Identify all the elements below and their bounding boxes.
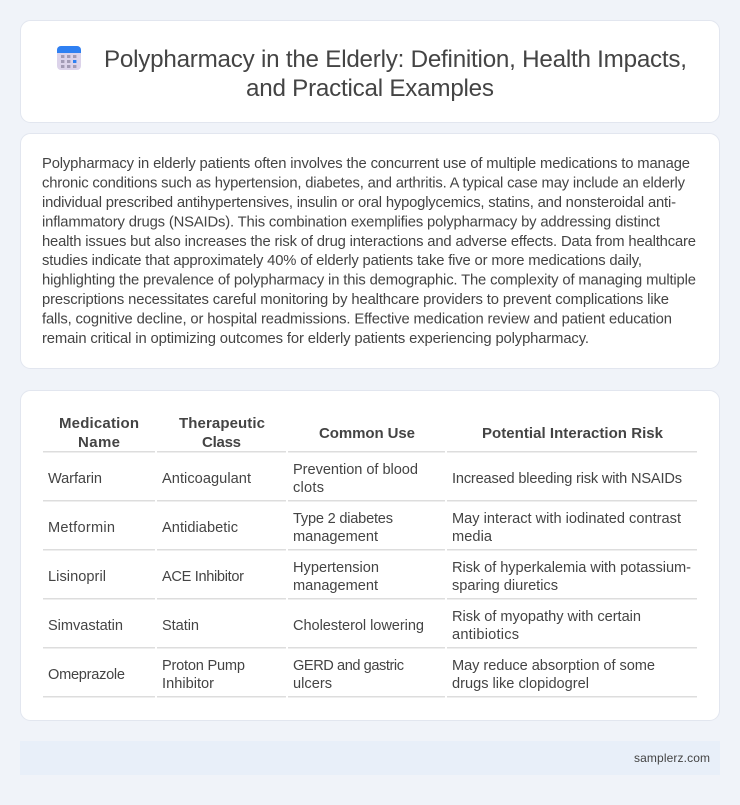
table row: Simvastatin xyxy=(43,609,697,648)
table row: Metformin: Metformin xyxy=(48,520,115,536)
table row: Omeprazole: GERD and gastric xyxy=(293,658,404,674)
table row: Metformin xyxy=(43,511,697,550)
panel: title card xyxy=(20,20,720,122)
table row: Lisinopril: Lisinopril xyxy=(48,569,106,585)
table row: Lisinopril xyxy=(43,560,697,600)
text block: polypharmacy overview: Polypharmacy in elderly patients often involves the concurrent use of multiple medications to manage xyxy=(42,156,690,172)
table row: Metformin: management xyxy=(293,529,378,545)
text block: polypharmacy overview: prescriptions necessitates careful monitoring by healthcare providers to prevent complications like xyxy=(42,292,669,308)
text block: polypharmacy overview: falls, cognitive decline, or hospital readmissions. Effective medication review and patient education xyxy=(42,312,672,328)
table header: Common Use xyxy=(319,425,415,442)
table row: Omeprazole xyxy=(43,658,697,698)
table row: Simvastatin: Simvastatin xyxy=(48,618,123,634)
table header: Potential Interaction Risk xyxy=(482,425,664,442)
table row: Omeprazole: May reduce absorption of some xyxy=(452,658,655,674)
footer: samplerz.com xyxy=(634,751,710,765)
table row: Warfarin: Anticoagulant xyxy=(162,471,251,487)
table row: Omeprazole: Proton Pump xyxy=(162,658,245,674)
table row: Metformin: May interact with iodinated contrast xyxy=(452,511,681,527)
text block: polypharmacy overview: individual prescribed antihypertensives, insulin or oral hypoglycemics, statins, and nonsteroidal anti- xyxy=(42,195,676,211)
panel: medication table xyxy=(20,390,720,720)
table row: Simvastatin: Risk of myopathy with certain xyxy=(452,609,641,625)
text block: polypharmacy overview xyxy=(42,156,696,347)
table header: Class xyxy=(202,434,241,451)
table row: Metformin: Antidiabetic xyxy=(162,520,238,536)
table row: Lisinopril: Risk of hyperkalemia with potassium- xyxy=(452,560,691,576)
table row: Lisinopril: management xyxy=(293,578,378,594)
text block: polypharmacy overview: health issues but also increases the risk of drug interactions and adverse effects. Data from healthcare xyxy=(42,234,696,250)
title: Polypharmacy in the Elderly: Definition, Health Impacts, xyxy=(104,46,687,73)
text block: polypharmacy overview: inflammatory drugs (NSAIDs). This combination exemplifies polypharmacy by addressing distinct xyxy=(42,214,660,230)
table header: Therapeutic xyxy=(179,415,265,432)
table row: Simvastatin: antibiotics xyxy=(452,627,519,643)
text block: polypharmacy overview: studies indicate that approximately 40% of elderly patients take five or more medications daily, xyxy=(42,253,642,269)
table row: Metformin: media xyxy=(452,529,493,545)
table row: Simvastatin: Statin xyxy=(162,618,199,634)
table row: Omeprazole: drugs like clopidogrel xyxy=(452,676,589,692)
table row: Warfarin: Prevention of blood xyxy=(293,462,418,478)
table row: Warfarin: Warfarin xyxy=(48,471,102,487)
title xyxy=(104,46,687,102)
panel: description xyxy=(20,134,720,368)
table row: Lisinopril: Hypertension xyxy=(293,560,379,576)
table header xyxy=(43,415,697,452)
table header: Name xyxy=(78,434,120,451)
table row: Metformin: Type 2 diabetes xyxy=(293,511,393,527)
table row: Warfarin xyxy=(43,462,697,502)
table row: Lisinopril: sparing diuretics xyxy=(452,578,558,594)
text block: polypharmacy overview: remain critical in optimizing outcomes for elderly patients experiencing polypharmacy. xyxy=(42,331,589,347)
text block: polypharmacy overview: chronic conditions such as hypertension, diabetes, and arthritis. A typical case may include an elderly xyxy=(42,175,686,191)
icon: calendar xyxy=(57,46,81,70)
footer xyxy=(20,741,720,775)
table row: Warfarin: clots xyxy=(293,480,324,496)
table row: Omeprazole: Omeprazole xyxy=(48,667,125,683)
table row: Lisinopril: ACE Inhibitor xyxy=(162,569,244,585)
table row: Omeprazole: ulcers xyxy=(293,676,332,692)
text block: polypharmacy overview: highlighting the prevalence of polypharmacy in this demographic. The complexity of managing multiple xyxy=(42,273,696,289)
table row: Warfarin: Increased bleeding risk with NSAIDs xyxy=(452,471,682,487)
table row: Omeprazole: Inhibitor xyxy=(162,676,214,692)
table header: Medication xyxy=(59,415,139,432)
table row: Simvastatin: Cholesterol lowering xyxy=(293,618,424,634)
title: and Practical Examples xyxy=(246,75,494,102)
